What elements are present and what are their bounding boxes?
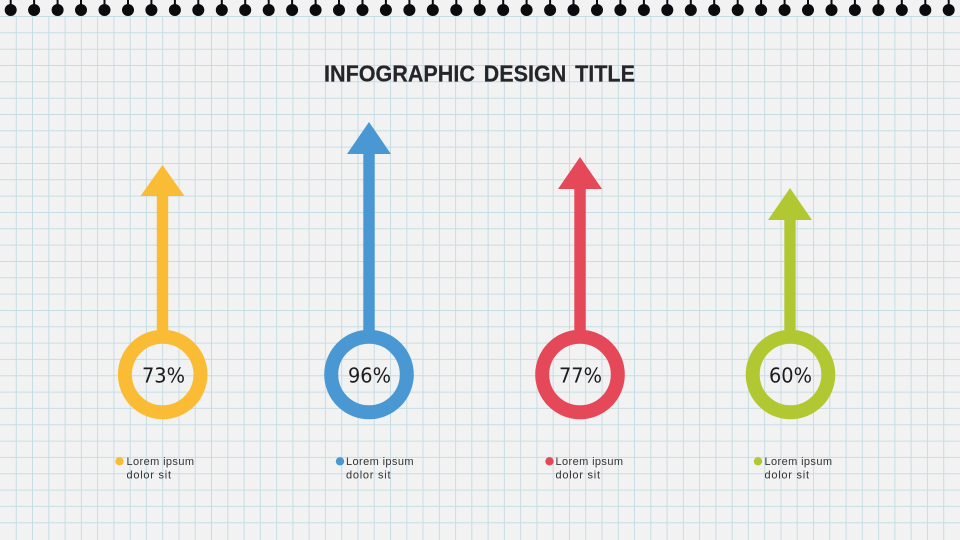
legend: yellow: dolor sit	[126, 470, 171, 482]
panel: 73% yellow arrow	[115, 165, 200, 482]
ring: green	[753, 337, 828, 412]
panel: 96% blue arrow	[331, 122, 414, 482]
title: INFOGRAPHIC DESIGN TITLE	[324, 60, 635, 86]
ring: red	[542, 337, 618, 412]
legend: red: dolor sit	[556, 470, 600, 482]
legend: green: Lorem ipsum	[764, 456, 832, 468]
legend: blue: dolor sit	[346, 470, 390, 482]
arrow: red	[558, 157, 602, 335]
legend: green: dolor sit	[764, 470, 809, 482]
ring: yellow	[125, 337, 200, 412]
arrow: green	[768, 188, 812, 335]
notebook binding holes	[11, 4, 949, 16]
value: 60%: 60%	[769, 364, 812, 388]
legend: green	[754, 456, 832, 482]
value: 73%: 73%	[142, 364, 185, 388]
legend: yellow	[115, 456, 194, 482]
arrow: yellow	[140, 165, 184, 335]
value: 77%: 77%	[559, 364, 602, 388]
arrow: blue	[347, 122, 391, 335]
panel: 60% green arrow	[753, 188, 832, 482]
ring: blue	[331, 337, 407, 412]
legend: blue: Lorem ipsum	[346, 456, 414, 468]
value: 96%: 96%	[348, 364, 391, 388]
legend: red: Lorem ipsum	[556, 456, 623, 468]
legend: blue	[336, 456, 414, 482]
legend: yellow: Lorem ipsum	[126, 456, 194, 468]
panel: 77% red arrow	[542, 157, 623, 482]
legend: red	[545, 456, 623, 482]
